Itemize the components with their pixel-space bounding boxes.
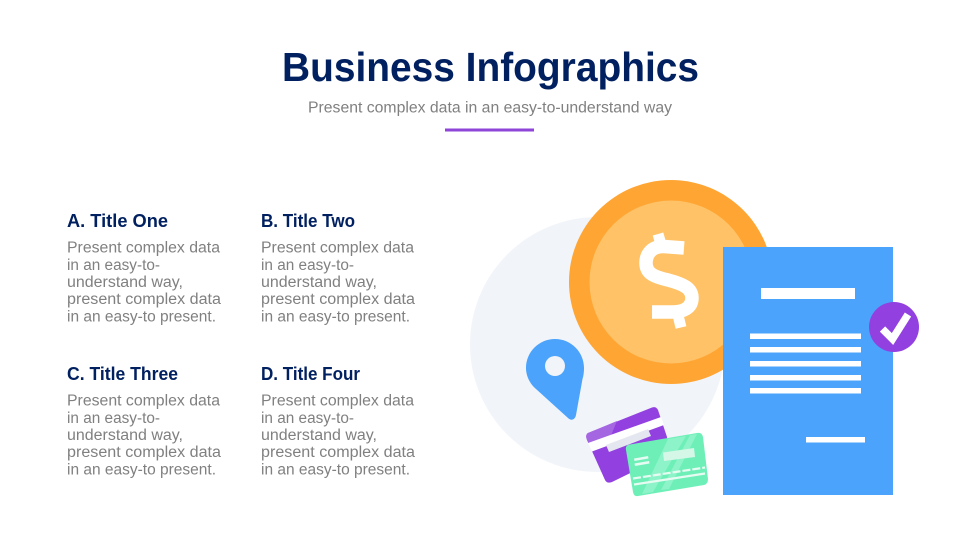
panel: B. Title Two [261, 210, 415, 326]
text block: D [261, 392, 415, 478]
panel: D. Title Four [261, 363, 415, 478]
text block: A [67, 240, 221, 326]
text block: B: present complex data [261, 291, 415, 308]
text block: C: Present complex data [67, 392, 220, 410]
text block: B: understand way, [261, 274, 377, 291]
text block: A: present complex data [67, 291, 221, 308]
icon: location pin [526, 339, 584, 420]
heading: A: A. Title One [67, 210, 168, 231]
text block: D: present complex data [261, 444, 415, 461]
text block: A: Present complex data [67, 240, 220, 256]
heading: B: B. Title Two [261, 210, 355, 231]
text block: A: in an easy-to- [67, 257, 160, 274]
title: Business Infographics [282, 44, 699, 90]
icon: green credit card [626, 433, 708, 496]
text block: D: in an easy-to- [261, 410, 354, 427]
text block: D: in an easy-to present. [261, 462, 410, 478]
text block: A: in an easy-to present. [67, 308, 216, 326]
text block: B: in an easy-to- [261, 257, 354, 274]
text block: C: in an easy-to present. [67, 462, 216, 478]
text block: C: understand way, [67, 427, 183, 444]
panel: A. Title One [67, 210, 221, 326]
heading: C: C. Title Three [67, 363, 178, 384]
icon: dollar coin [569, 180, 773, 384]
text block: D: understand way, [261, 427, 377, 444]
panel: C. Title Three [67, 363, 221, 478]
text block: B: in an easy-to present. [261, 308, 410, 326]
text block: C: present complex data [67, 444, 221, 461]
text block: B: Present complex data [261, 240, 414, 256]
text block: C [67, 392, 221, 478]
heading: D: D. Title Four [261, 363, 360, 384]
icon: check badge [869, 302, 919, 352]
text block: C: in an easy-to- [67, 410, 160, 427]
text block: B [261, 240, 415, 326]
background circle [470, 217, 725, 472]
title underline [445, 128, 534, 132]
icon: purple credit card [586, 407, 667, 483]
subtitle: Present complex data in an easy-to-understand way [308, 100, 672, 116]
text block: A: understand way, [67, 274, 183, 291]
text block: D: Present complex data [261, 392, 414, 410]
icon: blue document [723, 247, 893, 495]
